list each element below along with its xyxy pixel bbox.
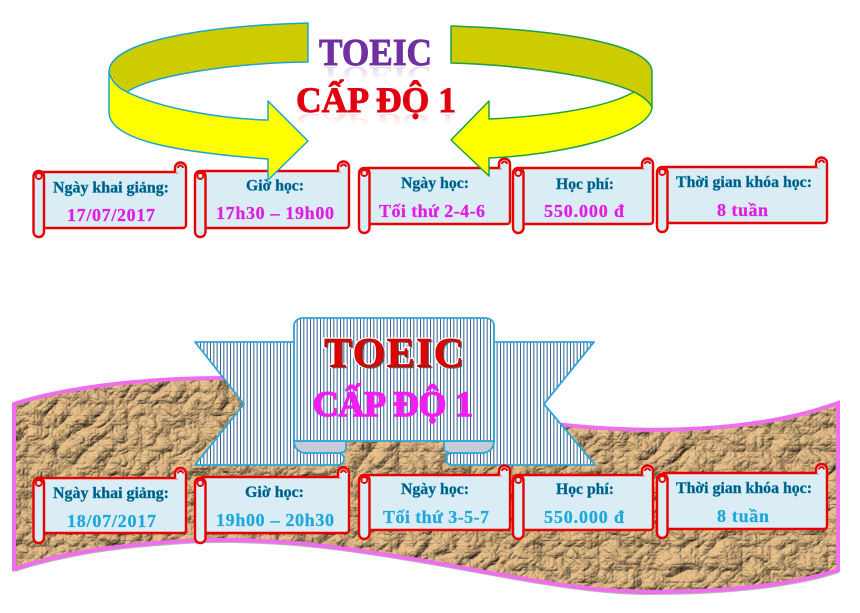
title: TOEIC top: TOEIC: [319, 62, 432, 87]
scroll: tuition 550.000 đ: 550.000 đ: [544, 201, 624, 221]
title: TOEIC on ribbon: TOEIC: [324, 331, 464, 377]
scroll: class time 17h30 – 19h00: Giờ học:: [246, 178, 304, 194]
title: CẤP ĐỘ 1 top: CẤP ĐỘ 1: [296, 110, 456, 131]
scroll: opening date 17/07/2017: [34, 162, 186, 237]
scroll: class time 19h00 – 20h30: [195, 468, 349, 543]
scroll: class days Tối thứ 2-4-6: Tối thứ 2-4-6: [379, 201, 485, 221]
scroll: opening date 18/07/2017: [34, 468, 186, 543]
scroll: class days Tối thứ 2-4-6: Ngày học:: [401, 175, 469, 192]
title: TOEIC on ribbon: TOEIC: [324, 331, 464, 377]
scroll: opening date 17/07/2017: Ngày khai giảng:: [53, 180, 169, 196]
ribbon: right tail: [446, 342, 595, 465]
ribbon banner: [195, 318, 595, 465]
ribbon: right fold: [444, 441, 494, 453]
scroll: class days Tối thứ 3-5-7: Ngày học:: [401, 481, 469, 498]
scroll: class time 19h00 – 20h30: 19h00 – 20h30: [216, 510, 334, 530]
panel: crumpled paper wave background: [14, 378, 839, 595]
ribbon: left fold: [294, 441, 346, 453]
title: TOEIC top: TOEIC: [319, 32, 432, 74]
scroll: class time 19h00 – 20h30: Giờ học:: [245, 484, 304, 501]
scroll: course duration 8 tuần: [657, 158, 827, 232]
scroll: course duration 8 tuần: 8 tuần: [717, 506, 769, 526]
ribbon: centre panel: [294, 318, 494, 441]
scroll: course duration 8 tuần: 8 tuần: [717, 200, 768, 220]
scroll: course duration 8 tuần: Thời gian khóa học:: [676, 480, 812, 497]
scroll: tuition 550.000 đ: Học phí:: [556, 176, 614, 193]
ribbon: left tail: [195, 342, 344, 465]
scroll: class days Tối thứ 3-5-7: [359, 466, 510, 539]
scroll: tuition 550.000 đ: [513, 466, 653, 539]
panel: top row schedule scrolls: [34, 158, 827, 237]
scroll: course duration 8 tuần: Thời gian khóa học:: [676, 174, 812, 191]
scroll: opening date 18/07/2017: 18/07/2017: [67, 511, 156, 531]
scroll: opening date 18/07/2017: Ngày khai giảng:: [53, 485, 169, 502]
scroll: course duration 8 tuần: [657, 464, 827, 538]
arrow: right curved yellow arrow: [451, 26, 652, 176]
title: CẤP ĐỘ 1 top: CẤP ĐỘ 1: [296, 80, 456, 120]
scroll: class time 17h30 – 19h00: [195, 162, 349, 237]
scroll: tuition 550.000 đ: Học phí:: [556, 481, 614, 498]
panel: bottom row schedule scrolls: [34, 464, 827, 543]
title: TOEIC on ribbon: TOEIC: [326, 332, 466, 378]
scroll: opening date 17/07/2017: 17/07/2017: [67, 205, 155, 225]
scroll: class days Tối thứ 3-5-7: Tối thứ 3-5-7: [383, 507, 489, 527]
scroll: class time 17h30 – 19h00: 17h30 – 19h00: [216, 203, 334, 223]
arrow: left curved yellow arrow: [109, 23, 308, 180]
scroll: tuition 550.000 đ: 550.000 đ: [544, 507, 624, 527]
scroll: tuition 550.000 đ: [513, 158, 653, 233]
scroll: class days Tối thứ 2-4-6: [359, 158, 510, 233]
title: CẤP ĐỘ 1 on ribbon: CẤP ĐỘ 1: [313, 384, 473, 424]
